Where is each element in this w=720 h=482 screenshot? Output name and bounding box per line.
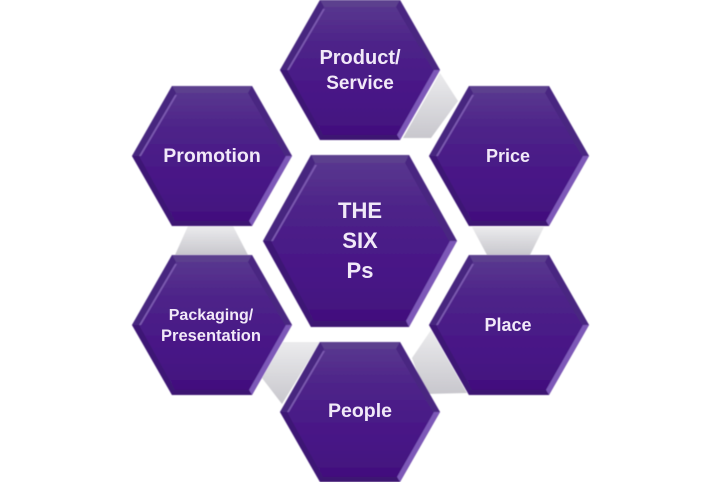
hexagon: centre, the six Ps: Ps [347,258,373,283]
hexagon: price [429,86,589,226]
hexagon: product/service: Product/ [319,47,401,69]
hexagon: centre, the six Ps: SIX [342,228,378,253]
hexagon: people: People [328,400,392,422]
hexagon: packaging/presentation: Presentation [161,327,261,345]
hexagon: people [280,342,440,482]
hexagon: place [429,255,589,395]
connector: packaging to promotion [175,226,248,255]
hexagon: centre, the six Ps [263,155,457,327]
hexagon: product/service: Service [326,73,394,94]
hexagon: packaging/presentation [132,255,292,395]
hexagon: product/service [280,0,440,140]
hexagon: promotion [132,86,292,226]
connector: place to people [412,330,467,394]
hexagon: price: Price [486,146,530,166]
hexagon: place: Place [484,315,532,335]
connector: price to place [472,227,544,255]
hexagon: promotion: Promotion [163,145,261,167]
hexagon: centre, the six Ps: THE [338,198,382,223]
hexagon: packaging/presentation: Packaging/ [169,307,254,324]
connector: people to packaging [262,342,320,404]
connector: product to price [403,73,458,138]
